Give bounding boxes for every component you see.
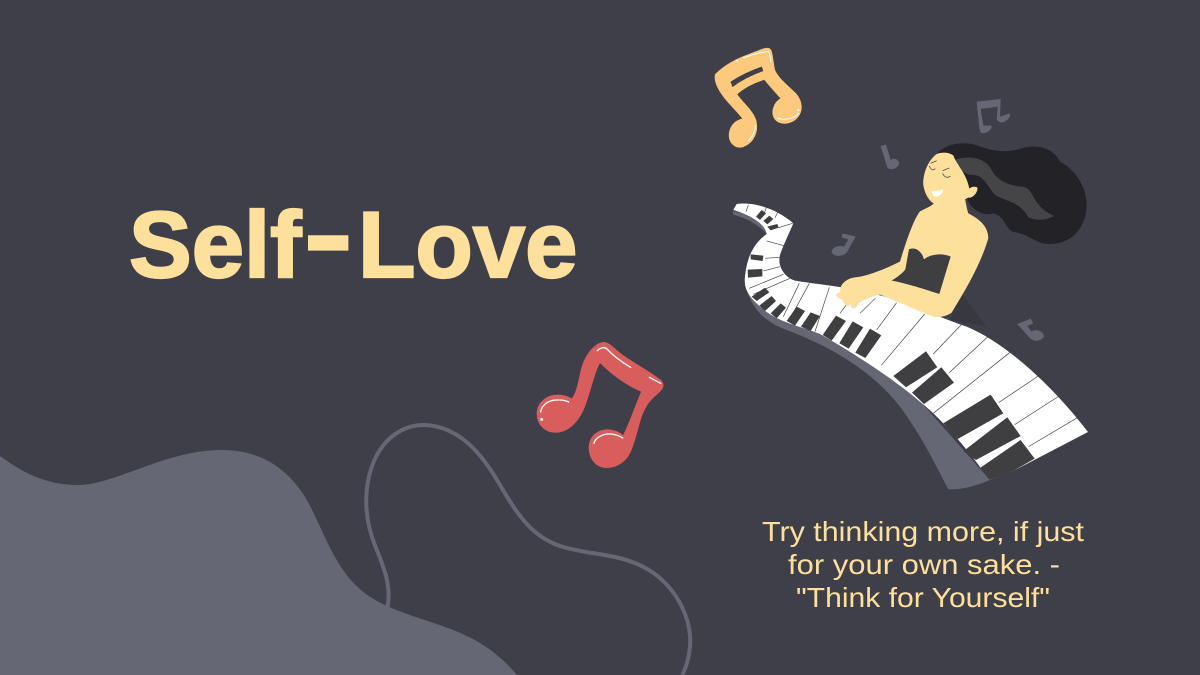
icon: yellow music note bbox=[716, 49, 801, 147]
title bbox=[129, 174, 577, 297]
quote: for your own sake. - bbox=[788, 549, 1060, 580]
face bbox=[923, 153, 977, 206]
illustration: pianist bbox=[733, 143, 1088, 489]
keyboard key lines bbox=[746, 205, 1078, 447]
title: - bbox=[304, 174, 353, 295]
background blob bbox=[0, 450, 517, 675]
icon: small grey note top right bbox=[977, 99, 1010, 133]
hair back bbox=[935, 143, 1087, 244]
keyboard black keys bbox=[748, 210, 1035, 480]
hair highlight bbox=[955, 157, 1054, 220]
icon: red music note bbox=[537, 343, 663, 467]
keyboard white keys bbox=[733, 203, 1088, 480]
title: Love bbox=[358, 192, 577, 297]
body and arms bbox=[836, 193, 988, 317]
small note 1 bbox=[881, 145, 899, 169]
quote bbox=[762, 516, 1084, 613]
background curved line bbox=[366, 425, 690, 675]
keyboard shadow band bbox=[733, 211, 990, 489]
dress bbox=[892, 249, 951, 294]
skirt shadow bbox=[950, 293, 987, 327]
eyes bbox=[929, 161, 951, 177]
small note 2 bbox=[832, 233, 856, 256]
mouth bbox=[931, 189, 943, 197]
small note 3 bbox=[1017, 319, 1044, 341]
quote: "Think for Yourself" bbox=[796, 582, 1050, 613]
title: Self bbox=[129, 192, 302, 297]
quote: Try thinking more, if just bbox=[762, 516, 1084, 547]
